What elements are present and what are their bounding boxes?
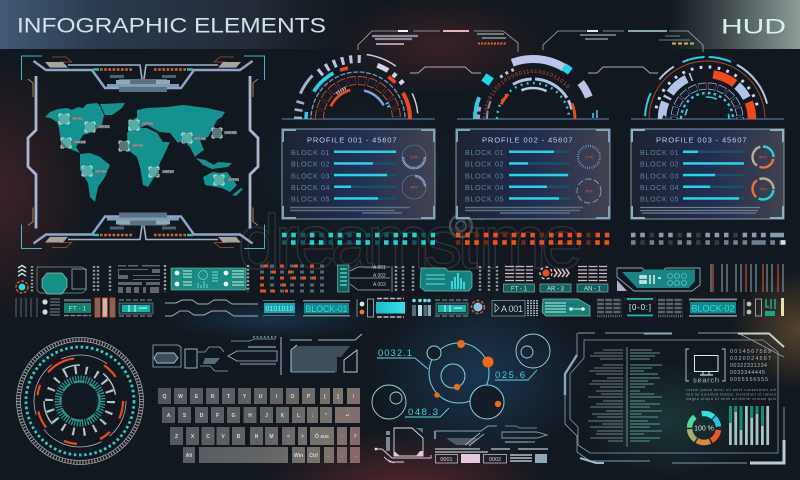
number list xyxy=(730,349,771,383)
gauge 2 xyxy=(457,55,609,120)
keyboard: G xyxy=(232,413,236,419)
title: INFOGRAPHIC ELEMENTS xyxy=(17,14,326,38)
keyboard: Alt xyxy=(186,453,193,459)
number list: 00322331234 xyxy=(730,363,767,369)
keyboard: Q xyxy=(163,394,167,400)
labels A 001 A 002 A 003: A 001 xyxy=(373,265,386,271)
map markers: UNIT 010 xyxy=(228,178,240,182)
keyboard: W xyxy=(178,394,183,400)
keyboard: X xyxy=(191,434,195,440)
tick columns xyxy=(480,266,497,292)
profile heading: PROFILE 002 - 45607 xyxy=(482,136,573,144)
keyboard: ↑ xyxy=(341,434,343,440)
keyboard: → xyxy=(352,453,358,459)
label AR-3 with chevrons xyxy=(540,267,571,292)
keyboard: D xyxy=(200,413,204,419)
keyboard: B xyxy=(237,434,241,440)
keyboard: ] xyxy=(337,394,339,400)
keyboard: F xyxy=(216,413,219,419)
cyan digit box: 0101010 xyxy=(266,306,294,313)
keyboard: L xyxy=(297,413,300,419)
teal module xyxy=(37,266,110,294)
label A 001 xyxy=(492,300,525,316)
donut 75%: 75% xyxy=(759,186,767,192)
label FT-1: FT - 1 xyxy=(511,286,528,292)
panel: profile 002 xyxy=(456,129,610,219)
watermark: dreamstime xyxy=(238,200,583,285)
block rows xyxy=(291,148,396,204)
panel: profile 001 xyxy=(282,129,435,219)
keyboard: Ctrl xyxy=(309,453,318,459)
paragraph: Lorem ipsum dolor sit amet consectetur adi xyxy=(686,388,776,392)
map markers xyxy=(59,114,240,185)
label AR-3 with chevrons: AR - 3 xyxy=(547,286,565,292)
block rows: BLOCK 03 xyxy=(291,171,330,180)
block rows: BLOCK 05 xyxy=(465,195,504,204)
bricks xyxy=(597,300,683,316)
keyboard: : xyxy=(312,413,314,419)
panel: profile 003 xyxy=(631,129,784,219)
lower mini elements xyxy=(375,426,548,463)
donut 55% xyxy=(752,146,774,168)
profile heading: PROFILE 001 - 45607 xyxy=(307,136,397,144)
keyboard: K xyxy=(281,413,285,419)
donut 63% xyxy=(402,145,426,169)
block rows: BLOCK 04 xyxy=(640,183,679,192)
keyboard: R xyxy=(211,394,215,400)
orbit callouts: 025.6 xyxy=(495,370,525,381)
wavy connector lines xyxy=(165,300,258,316)
map markers: UNIT 007 xyxy=(163,170,175,174)
teal control shape xyxy=(617,268,700,291)
keyboard: H xyxy=(248,413,252,419)
widget strip row 1 xyxy=(16,264,783,294)
number list: 0014567589 xyxy=(730,349,771,355)
donut 45% xyxy=(402,175,426,199)
block rows: BLOCK 01 xyxy=(640,148,679,157)
map markers: UNIT 002 xyxy=(98,125,110,129)
labels A 001 A 002 A 003: A 002 xyxy=(373,273,386,279)
label BLOCK-01: BLOCK-01 xyxy=(306,304,348,314)
donut 45%: 45% xyxy=(410,184,418,190)
map markers: UNIT 009 xyxy=(225,131,237,135)
digital readout xyxy=(627,298,653,316)
block rows: BLOCK 04 xyxy=(291,183,330,192)
labels A 001 A 002 A 003: A 003 xyxy=(373,282,386,288)
arrow module sketch xyxy=(228,337,281,375)
keyboard: ↓ xyxy=(341,453,343,459)
colour squares xyxy=(260,266,330,291)
keyboard: P xyxy=(307,394,311,400)
lower mini elements: 0001 xyxy=(440,457,453,463)
labels A 001 A 002 A 003 xyxy=(350,265,396,292)
keyboard: Win xyxy=(294,453,303,459)
keyboard: ? xyxy=(353,434,357,440)
keyboard: > xyxy=(301,434,304,440)
label BLOCK-01 xyxy=(303,300,350,316)
paragraph xyxy=(686,388,776,401)
label FT-1 xyxy=(64,299,91,316)
dot bars xyxy=(412,299,431,316)
teal switch xyxy=(435,300,468,316)
footer strips xyxy=(465,208,583,213)
dot matrix xyxy=(528,300,537,316)
keyboard: V xyxy=(221,434,225,440)
block rows xyxy=(465,148,570,204)
paragraph: sed do eiusmod tempor incididunt ut labore xyxy=(686,392,776,396)
block rows: BLOCK 05 xyxy=(291,195,330,204)
icon: blue dot xyxy=(472,300,484,314)
map markers: UNIT 001 xyxy=(72,117,84,121)
keyboard: J xyxy=(265,413,268,419)
keyboard: < xyxy=(287,434,290,440)
map markers: UNIT 008 xyxy=(194,137,206,141)
block rows: BLOCK 02 xyxy=(291,160,330,169)
keyboard: [ xyxy=(324,394,326,400)
donut 63%: 63% xyxy=(410,154,418,160)
keyboard: \ xyxy=(353,394,355,400)
search icon xyxy=(686,349,725,384)
keyboard: " xyxy=(325,413,328,419)
block rows: BLOCK 01 xyxy=(465,148,504,157)
profile heading: PROFILE 003 - 45607 xyxy=(656,136,747,144)
keyboard: Z xyxy=(175,434,178,440)
teal tag xyxy=(542,299,590,316)
status squares: grey xyxy=(631,235,786,245)
donut 76%: 76% xyxy=(585,188,593,194)
keyboard: A xyxy=(167,413,171,419)
footer strips xyxy=(290,208,410,213)
keyboard: E xyxy=(195,394,199,400)
orbit callouts: 048.3 xyxy=(408,407,438,418)
number list: 0033344445 xyxy=(730,370,765,376)
donut chart 100% xyxy=(690,414,718,442)
HUD label: HUD xyxy=(721,14,786,38)
search icon: search xyxy=(693,376,719,384)
angular panel sketch xyxy=(290,334,362,372)
tick columns xyxy=(403,266,413,292)
top connector lines xyxy=(358,31,703,73)
keyboard: S xyxy=(183,413,187,419)
map markers: UNIT 006 xyxy=(142,122,154,126)
paragraph: magna aliqua Ut enim ad minim veniam quis xyxy=(686,397,776,401)
keyboard: T xyxy=(227,394,230,400)
keyboard: Y xyxy=(243,394,247,400)
donut chart 100%: 100 % xyxy=(694,426,714,432)
teal list box xyxy=(338,265,349,292)
donut 55%: 55% xyxy=(759,154,767,160)
block rows: BLOCK 05 xyxy=(640,195,679,204)
small switch xyxy=(357,299,374,317)
status squares: cyan xyxy=(282,235,435,242)
small module sketch xyxy=(153,345,228,371)
label FT-1: FT - 1 xyxy=(69,306,86,312)
keyboard: I xyxy=(276,394,278,400)
keyboard: C xyxy=(206,434,210,440)
label BLOCK-02: BLOCK-02 xyxy=(692,304,734,314)
donut 27%: 27% xyxy=(585,154,593,160)
orbit nodes xyxy=(434,340,501,407)
map markers: UNIT 003 xyxy=(74,140,86,144)
block rows xyxy=(640,148,744,204)
footer strips xyxy=(640,208,760,213)
label AN-1 xyxy=(577,266,608,292)
icon: chevrons and dot xyxy=(16,266,32,293)
lower mini elements: 0002 xyxy=(489,457,501,463)
teal switch xyxy=(119,300,153,316)
digital readout: [0-0:] xyxy=(629,303,651,312)
label A 001: A 001 xyxy=(501,304,523,314)
keyboard xyxy=(158,388,360,463)
orbit callouts: 0032.1 xyxy=(378,348,412,359)
data panel: search xyxy=(565,333,784,463)
keyboard: Ö sus xyxy=(315,433,329,440)
circular radar dial xyxy=(16,338,144,464)
block rows: BLOCK 02 xyxy=(465,160,504,169)
text columns xyxy=(588,347,662,447)
grey blocks xyxy=(118,265,160,293)
map frame xyxy=(22,56,264,248)
map markers: UNIT 005 xyxy=(132,144,144,148)
keyboard: N xyxy=(255,434,259,440)
world map xyxy=(45,103,243,202)
block rows: BLOCK 03 xyxy=(465,171,504,180)
keyboard: ↵ xyxy=(345,413,350,419)
dashboard board xyxy=(165,265,248,292)
teal chart panel xyxy=(420,268,472,291)
number list: 0055556555 xyxy=(730,377,768,383)
orbit callouts xyxy=(377,348,537,418)
keyboard: ← xyxy=(326,453,332,459)
gauge 2: 01010011001010001101001011010 xyxy=(483,69,570,119)
donut 76% xyxy=(577,179,601,203)
block rows: BLOCK 03 xyxy=(640,171,679,180)
donut 75% xyxy=(752,178,774,200)
gauge 1 xyxy=(282,54,435,120)
donut 27% xyxy=(578,146,600,168)
small controls xyxy=(744,298,784,316)
panel frame xyxy=(565,333,784,463)
title band xyxy=(0,0,800,49)
widget strip row 2 xyxy=(16,298,784,317)
orbit diagram xyxy=(372,334,550,419)
gauge 3 xyxy=(631,56,784,120)
world map panel xyxy=(22,56,264,248)
label FT-1 xyxy=(504,266,534,292)
status squares: orange xyxy=(456,235,610,242)
block rows: BLOCK 04 xyxy=(465,183,504,192)
cyan digit box xyxy=(263,300,295,316)
label AN-1: AN - 1 xyxy=(584,286,602,292)
block rows: BLOCK 02 xyxy=(640,160,679,169)
vertical ticks xyxy=(16,298,37,317)
bar chart xyxy=(729,406,769,445)
label BLOCK-02 xyxy=(689,298,737,317)
number list: 0020024567 xyxy=(730,356,771,362)
keyboard: U xyxy=(259,394,263,400)
keyboard: O xyxy=(291,394,295,400)
cyan bar xyxy=(376,298,405,317)
slider lines xyxy=(711,264,783,292)
map markers: UNIT 004 xyxy=(95,170,107,174)
icon: dots and lines xyxy=(42,299,60,315)
keyboard: M xyxy=(269,434,274,440)
block rows: BLOCK 01 xyxy=(291,148,330,157)
red sliders xyxy=(95,298,115,317)
